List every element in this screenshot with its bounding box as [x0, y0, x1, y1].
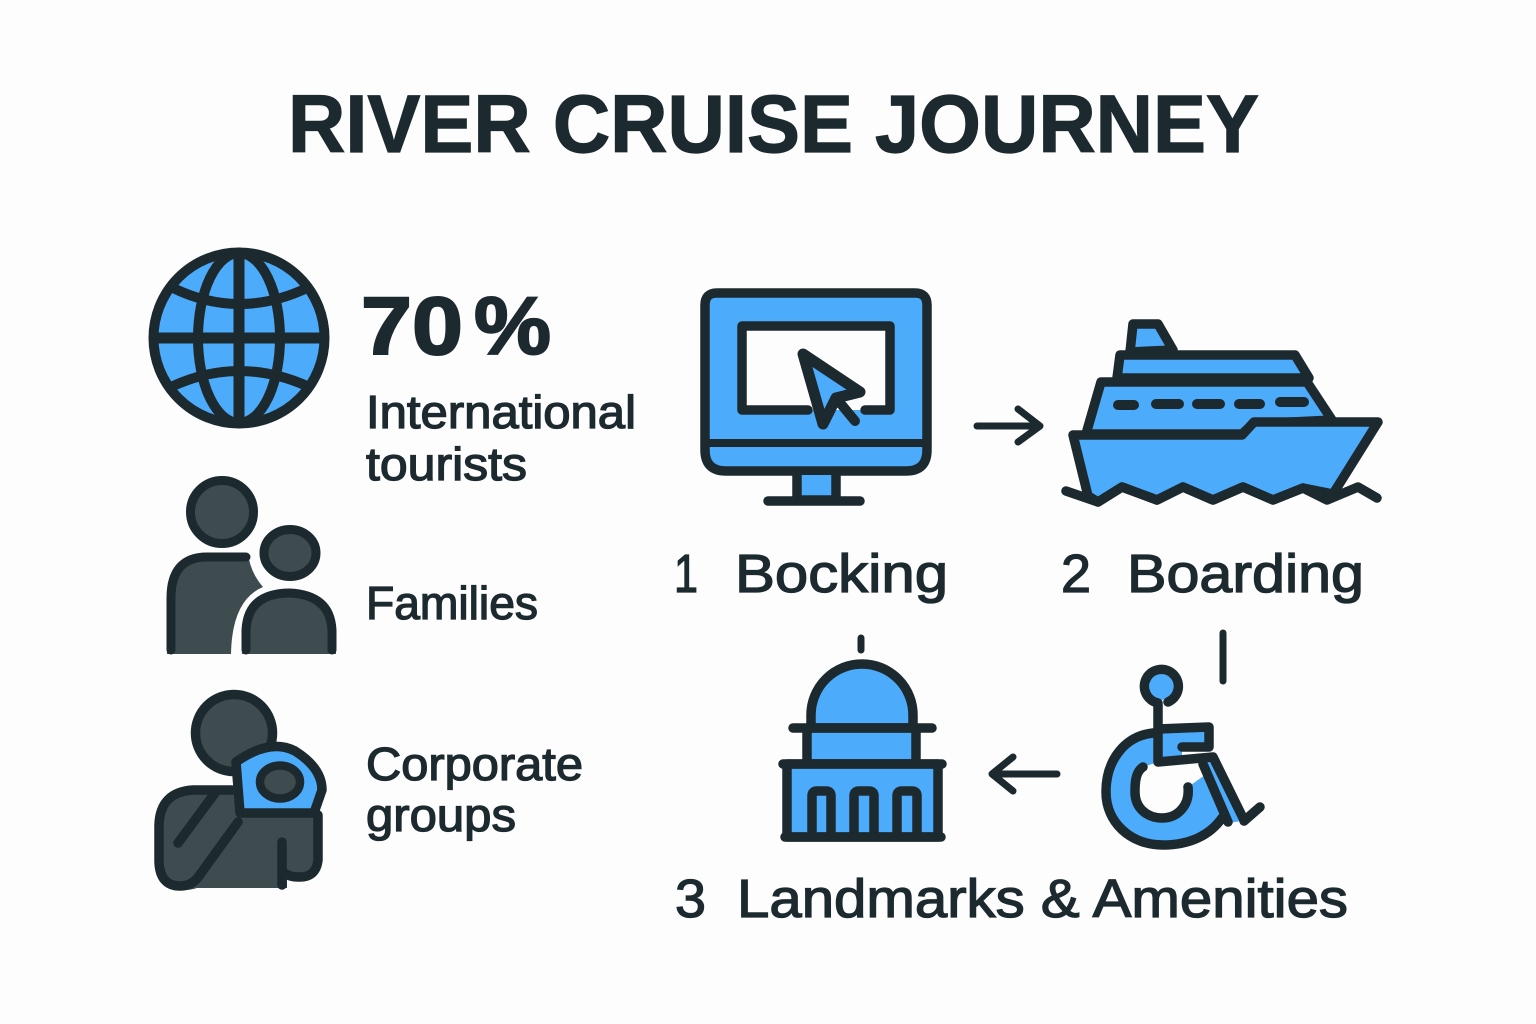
label: step 2 boarding: Boarding — [1127, 544, 1364, 604]
label: step 1 booking: 1 — [674, 544, 698, 604]
stat: 70 percent: % — [474, 281, 551, 372]
stat: 70 percent: 70 — [361, 281, 463, 372]
label: step 3 landmarks and amenities: Landmarks & Amenities — [737, 869, 1348, 929]
title: RIVER CRUISE JOURNEY — [288, 79, 1259, 170]
label: international tourists: International — [366, 386, 636, 438]
panel: journey steps — [674, 293, 1378, 929]
icon: cruise ship — [1066, 324, 1378, 502]
arrow: amenities to landmarks — [992, 757, 1057, 791]
label: step 1 booking: Bocking — [735, 544, 948, 604]
icon: family — [167, 480, 336, 654]
icon: computer booking — [705, 293, 927, 501]
icon: corporate group member with badge — [155, 694, 322, 890]
label: corporate groups: groups — [366, 789, 516, 841]
label: step 2 boarding: 2 — [1061, 544, 1091, 604]
icon: globe — [154, 252, 324, 424]
panel: traveller segments — [154, 252, 636, 890]
label: step 3 landmarks and amenities: 3 — [675, 869, 706, 929]
label: corporate groups — [366, 738, 583, 841]
icon: domed landmark — [783, 638, 942, 837]
label: corporate groups: Corporate — [366, 738, 583, 790]
connector: boarding to amenities — [1220, 633, 1226, 681]
arrow: booking to boarding — [977, 409, 1040, 442]
label: international tourists: tourists — [366, 438, 527, 490]
icon: wheelchair accessibility — [1106, 669, 1260, 845]
stat: 70 percent — [361, 281, 551, 372]
label: international tourists — [366, 386, 636, 490]
label: families: Families — [366, 577, 538, 629]
